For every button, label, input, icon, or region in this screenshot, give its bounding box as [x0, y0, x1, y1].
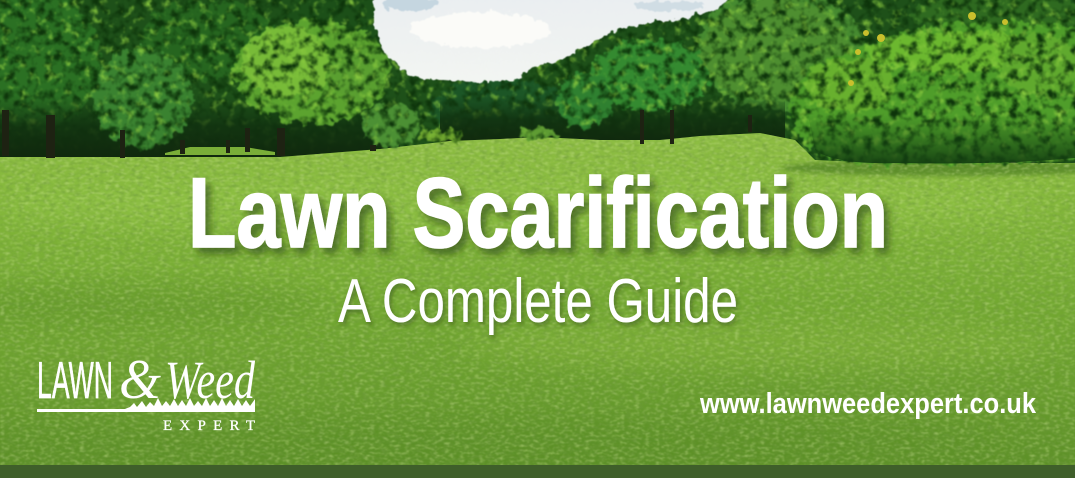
logo grass line	[37, 398, 255, 412]
subtitle: A Complete Guide	[338, 267, 738, 336]
logo ampersand: &	[119, 349, 161, 411]
yellow flowers	[848, 12, 1008, 86]
footer band	[0, 465, 1075, 478]
understory shade	[0, 95, 785, 157]
logo tagline: EXPERT	[163, 418, 255, 434]
bright tree	[234, 20, 390, 124]
centre-right trees	[557, 0, 850, 128]
logo wordmark: Lawn: LAWN	[37, 352, 113, 410]
left trees	[92, 20, 562, 148]
woodland backdrop	[0, 0, 1075, 165]
logo wordmark: Weed: Weed	[165, 350, 256, 410]
tree trunks	[2, 110, 752, 158]
bush base shade	[808, 115, 1075, 163]
sky	[374, 0, 742, 82]
small round tree	[360, 104, 420, 146]
hedge	[420, 130, 462, 142]
title: Lawn Scarification	[188, 157, 888, 268]
lawn	[0, 130, 1075, 466]
logo	[37, 349, 256, 434]
website url: www.lawnweedexpert.co.uk	[699, 388, 1037, 420]
right bush	[788, 22, 1075, 164]
mid-green tree	[92, 48, 192, 148]
